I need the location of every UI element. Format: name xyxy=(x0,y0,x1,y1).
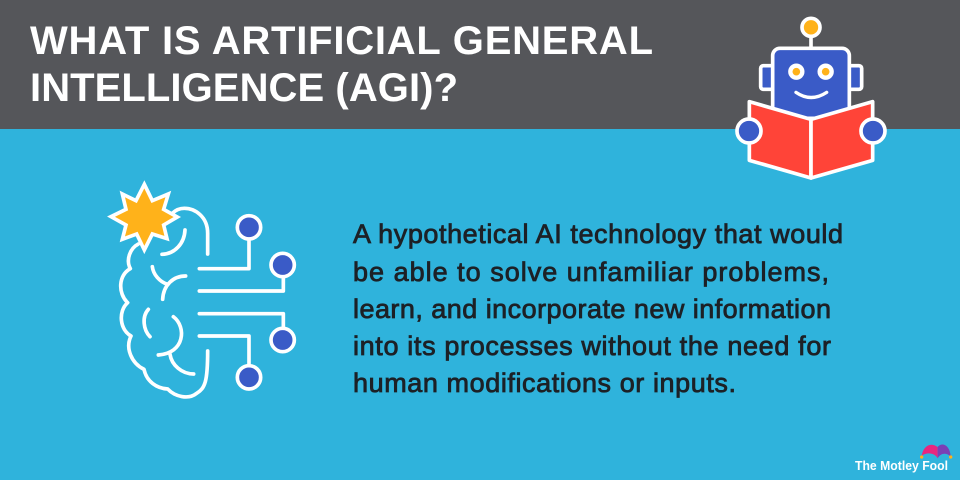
wordmark: The Motley Fool xyxy=(855,459,948,473)
logo: The Motley Fool xyxy=(855,444,952,473)
robot antenna xyxy=(802,18,820,48)
robot ears xyxy=(761,66,862,89)
header band xyxy=(0,0,960,129)
title: INTELLIGENCE (AGI)? xyxy=(30,66,458,110)
spark xyxy=(111,184,177,250)
icon: robot reading a book xyxy=(737,18,885,178)
robot face xyxy=(790,66,832,97)
definition text: human modifications or inputs. xyxy=(353,368,736,398)
robot hands xyxy=(737,119,885,143)
definition text: A hypothetical AI technology that would xyxy=(353,219,843,249)
jester hat xyxy=(920,444,952,459)
definition text xyxy=(353,219,843,398)
circuit lines and nodes xyxy=(199,216,294,389)
definition text: into its processes without the need for xyxy=(353,331,831,361)
title xyxy=(30,19,653,110)
definition text: learn, and incorporate new information xyxy=(353,294,831,324)
definition text: be able to solve unfamiliar problems, xyxy=(353,257,829,287)
robot head xyxy=(773,48,849,118)
brain outline xyxy=(121,208,208,397)
open book xyxy=(749,102,873,178)
title: WHAT IS ARTIFICIAL GENERAL xyxy=(30,19,653,63)
icon: brain with circuits and spark xyxy=(111,184,294,397)
